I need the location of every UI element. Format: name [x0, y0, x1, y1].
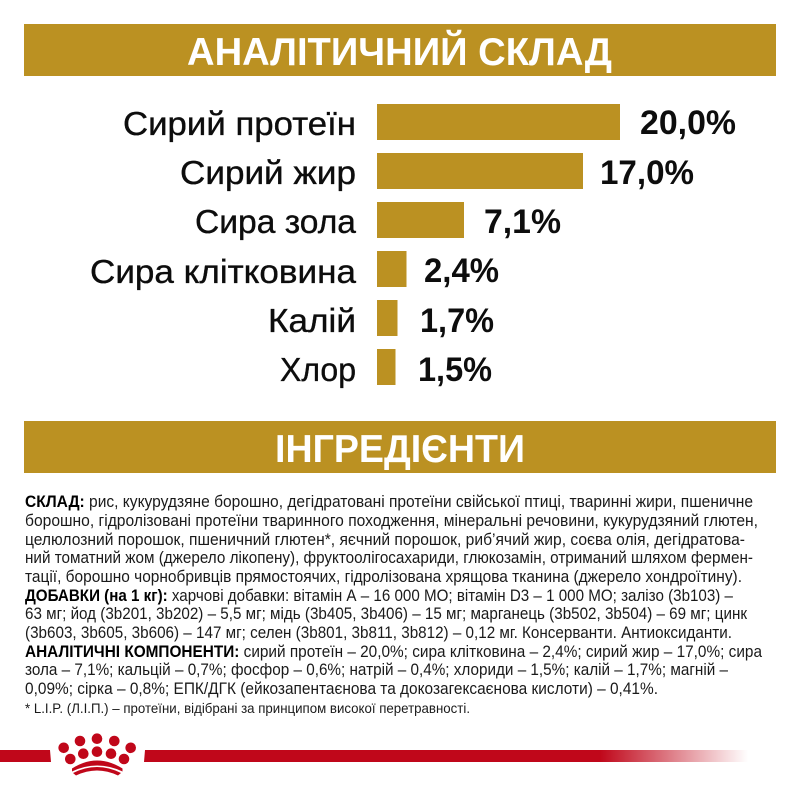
- heading band: ingredients: ІНГРЕДІЄНТИ: [275, 428, 525, 471]
- row: crude protein: Сирий протеїн: [123, 105, 356, 142]
- ingredients text block: СКЛАД: рис, кукурудзяне борошно, дегідратовані протеїни свійської птиці, тваринні жири, пшеничне: [25, 492, 753, 511]
- row: crude fibre: [90, 251, 499, 290]
- row: crude protein: 20,0%: [640, 104, 736, 142]
- ingredients text block: зола – 7,1%; кальцій – 0,7%; фосфор – 0,6%; натрій – 0,4%; хлориди – 1,5%; калій – 1,7%; магній –: [25, 660, 729, 679]
- ingredients text block: (3b603, 3b605, 3b606) – 147 мг; селен (3b801, 3b811, 3b812) – 0,12 мг. Консерванти. Антиоксиданти.: [25, 623, 732, 642]
- row: potassium: [268, 300, 494, 340]
- icon: crown logo: [58, 733, 136, 776]
- bar chart: analytical composition: [90, 104, 736, 389]
- footnote: * L.I.P. (Л.І.П.) – протеїни, відібрані за принципом високої перетравності.: [25, 700, 470, 716]
- row: crude fat: Сирий жир: [180, 154, 356, 191]
- row: crude ash: [195, 202, 561, 241]
- row: crude ash: Сира зола: [195, 203, 357, 240]
- row: crude fat: 17,0%: [600, 154, 694, 192]
- ingredients text block: целюлозний порошок, пшеничний глютен*, яєчний порошок, риб’ячий жир, соєва олія, дегідратова-: [25, 530, 745, 549]
- heading band: analytical composition: АНАЛІТИЧНИЙ СКЛАД: [187, 29, 612, 74]
- row: chlorine: Хлор: [280, 351, 356, 388]
- row: crude fibre: 2,4%: [424, 252, 499, 290]
- ingredients text block: ний томатний жом (джерело лікопену), фруктоолігосахариди, глюкозамін, отриманий шляхом фермен-: [25, 548, 753, 567]
- row: chlorine: [280, 349, 492, 389]
- row: chlorine: 1,5%: [418, 351, 492, 389]
- ingredients text block: тації, борошно чорнобривців прямостоячих, гідролізована хрящова тканина (джерело хондроїтину).: [25, 567, 742, 586]
- ingredients text block: 63 мг; йод (3b201, 3b202) – 5,5 мг; мідь (3b405, 3b406) – 15 мг; марганець (3b502, 3b504) – 69 мг; цинк: [25, 604, 748, 623]
- ribbon: left: [0, 750, 51, 762]
- ingredients text block: АНАЛІТИЧНІ КОМПОНЕНТИ: сирий протеїн – 20,0%; сира клітковина – 2,4%; сирий жир – 17,0%; сира: [25, 642, 763, 661]
- row: crude ash: 7,1%: [484, 203, 561, 241]
- ingredients text block: [25, 492, 763, 698]
- heading band: ingredients: [24, 421, 776, 473]
- row: crude fibre: Сира клітковина: [90, 253, 357, 290]
- row: crude protein: [123, 104, 736, 142]
- ribbon: right fading: [144, 750, 748, 762]
- ingredients text block: 0,09%; сірка – 0,8%; ЕПК/ДГК (ейкозапентаєнова та докозагексаєнова кислоти) – 0,41%.: [25, 679, 658, 698]
- heading band: analytical composition: [24, 24, 776, 76]
- row: potassium: 1,7%: [420, 302, 494, 340]
- ingredients text block: борошно, гідролізовані протеїни тваринного походження, мінеральні речовини, кукурудзяний глютен,: [25, 511, 758, 530]
- row: crude fat: [180, 153, 694, 192]
- row: potassium: Калій: [268, 302, 356, 339]
- ingredients text block: ДОБАВКИ (на 1 кг): харчові добавки: вітамін А – 16 000 МО; вітамін D3 – 1 000 МО; залізо (3b103) –: [25, 586, 734, 605]
